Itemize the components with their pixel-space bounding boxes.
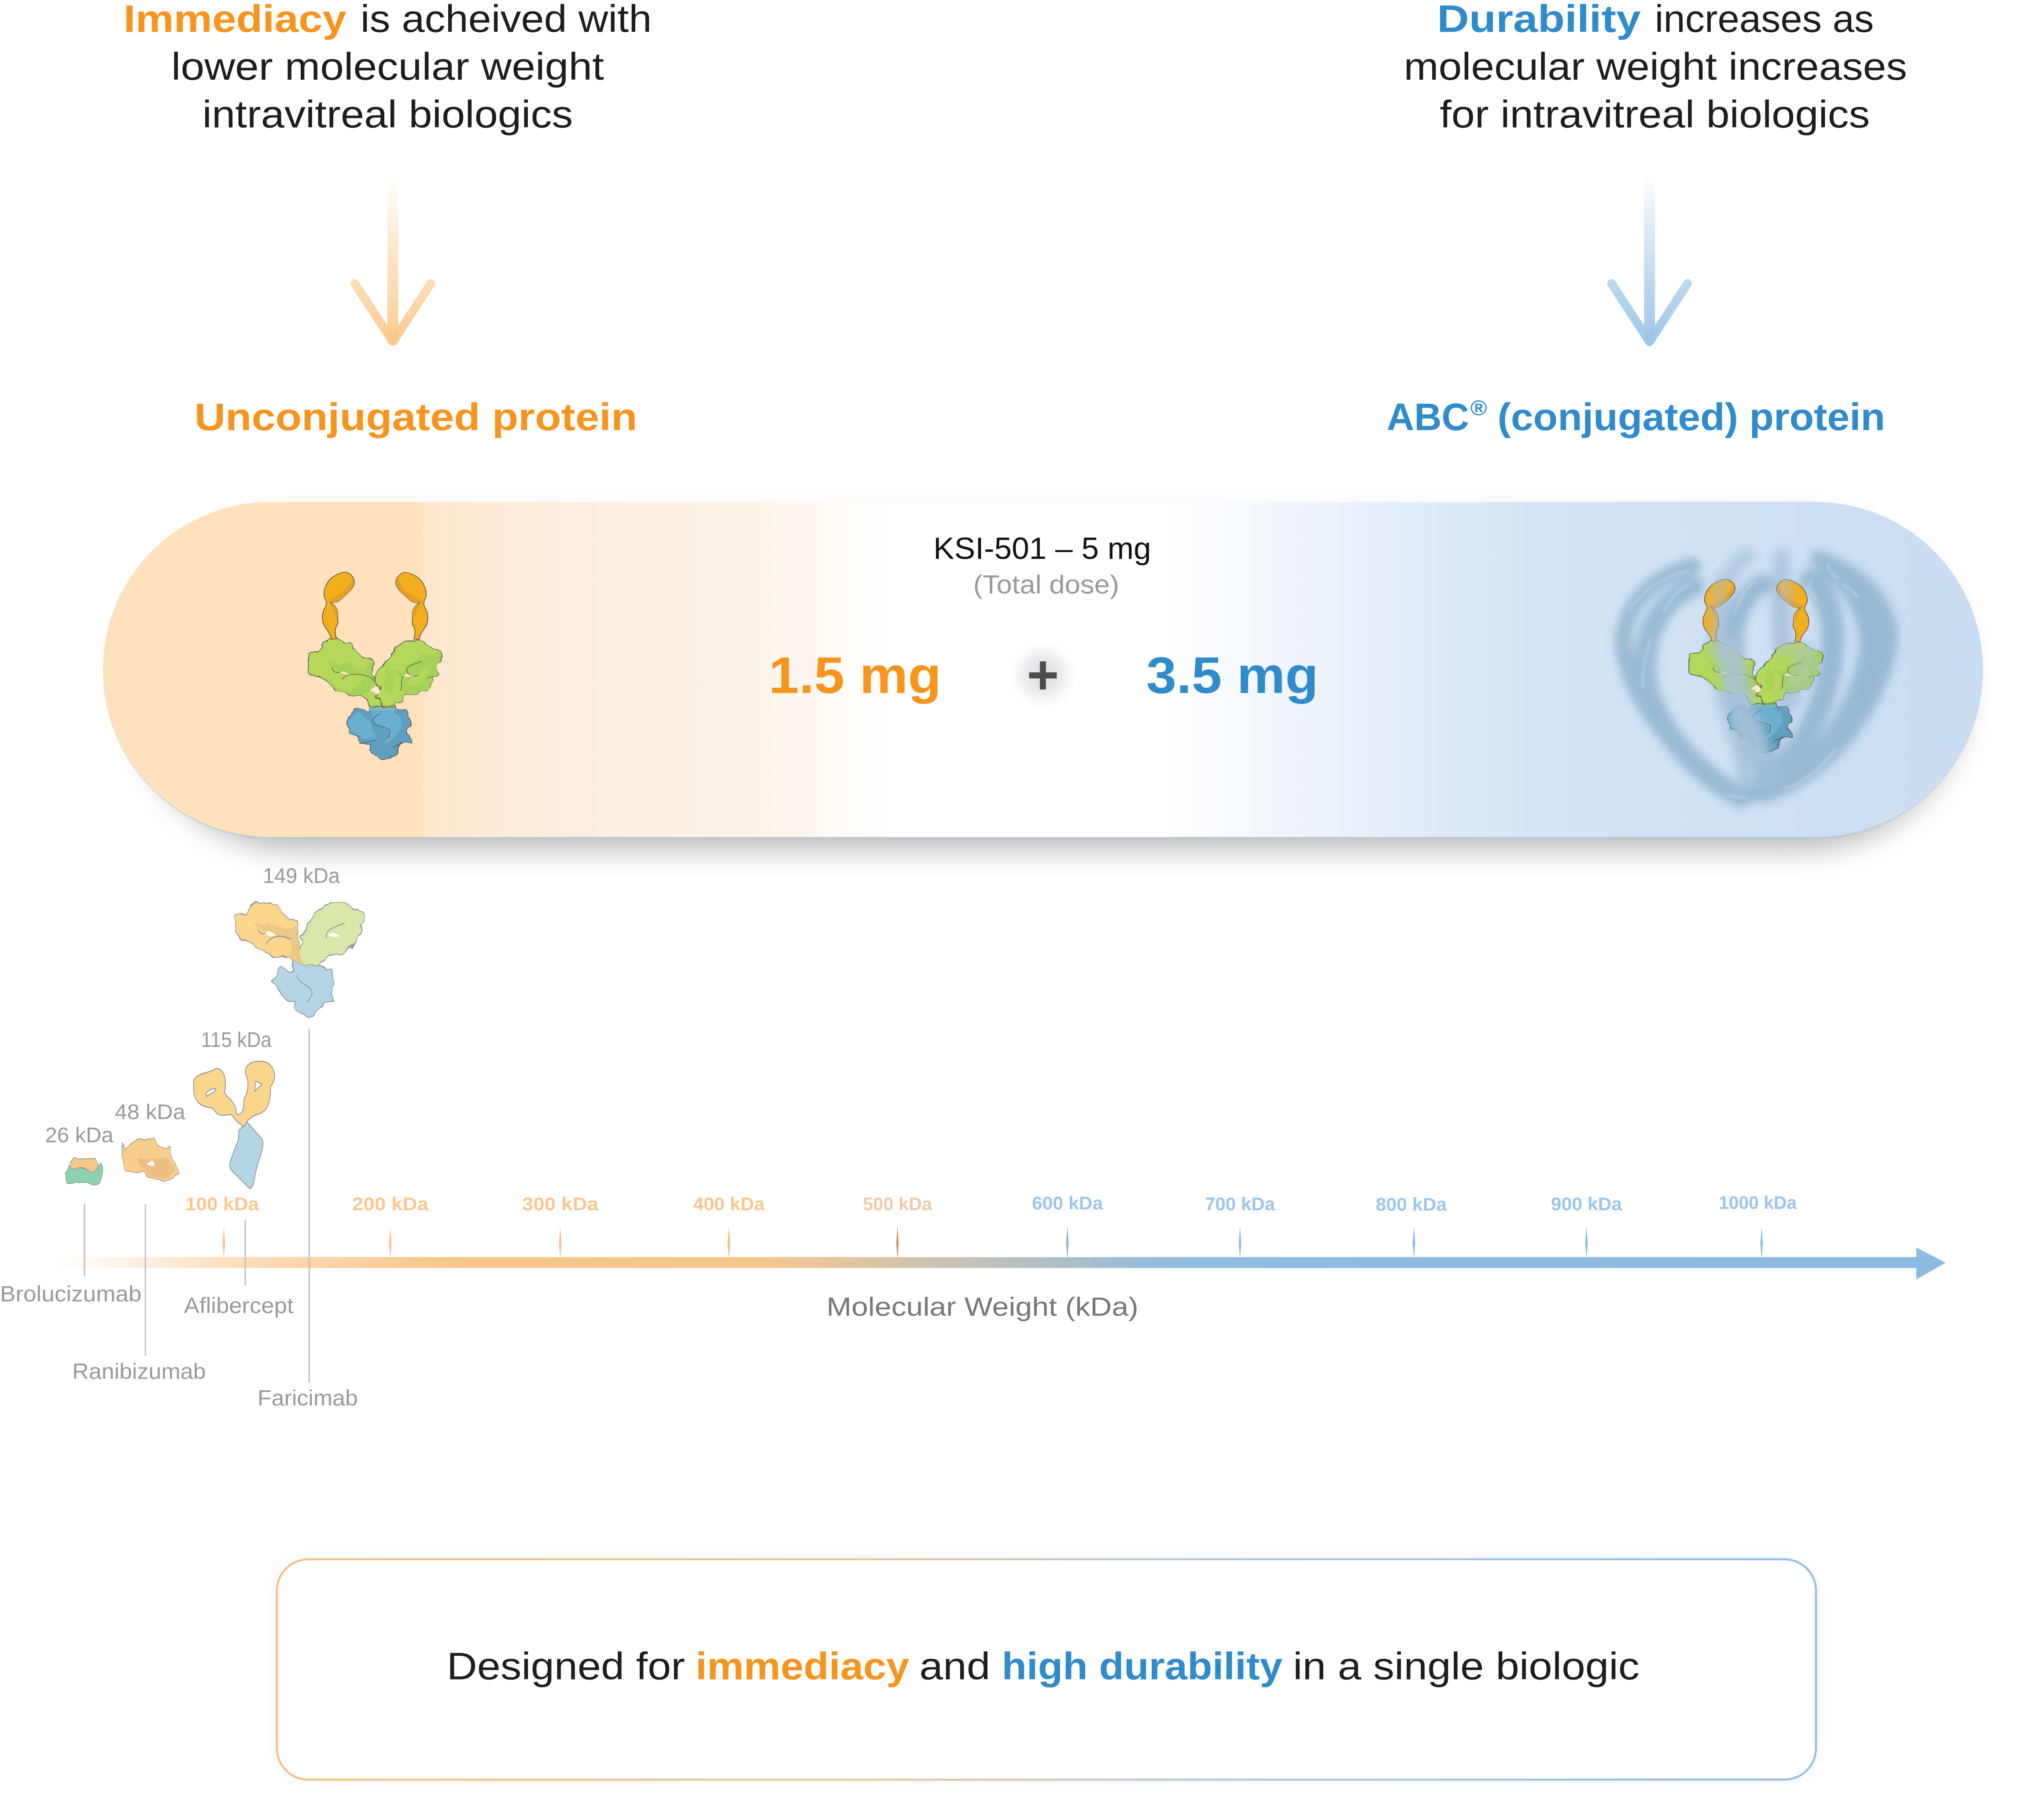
- plus sign: +: [1027, 644, 1059, 706]
- heading: immediacy: intravitreal biologics: [203, 93, 573, 136]
- conclusion text: [447, 1644, 1640, 1687]
- chart: molecular weight axis: [52, 1192, 1945, 1322]
- dose: unconjugated: 1.5 mg: [769, 646, 941, 704]
- heading: immediacy: lower molecular weight: [171, 45, 604, 88]
- icon: conjugated protein with polymer: [1624, 556, 1890, 798]
- label: ABC conjugated protein: ABC: [1387, 395, 1469, 438]
- axis tick labels: 100 kDa: [185, 1194, 259, 1214]
- icon: aflibercept molecule: [194, 1061, 275, 1188]
- panel: conclusion box: [277, 1559, 1816, 1779]
- total dose note: (Total dose): [973, 570, 1119, 599]
- axis arrow: [52, 1247, 1945, 1279]
- axis title: Molecular Weight (kDa): [826, 1292, 1138, 1322]
- axis tick labels: [185, 1192, 1797, 1215]
- arrow: down to unconjugated protein: [355, 174, 431, 342]
- label: Faricimab: Faricimab: [258, 1386, 358, 1411]
- icon: ranibizumab molecule: [122, 1138, 179, 1180]
- axis tick labels: 200 kDa: [352, 1194, 429, 1214]
- conclusion text: Designed for: [447, 1644, 685, 1687]
- label: 149 kDa: 149 kDa: [263, 865, 340, 888]
- axis tick labels: 700 kDa: [1205, 1194, 1275, 1214]
- icon: faricimab molecule: [234, 901, 365, 1017]
- label: ABC conjugated protein: ®: [1470, 397, 1487, 420]
- label: Ranibizumab: Ranibizumab: [72, 1359, 206, 1384]
- panel: dose pill: [103, 502, 1983, 850]
- axis ticks: [222, 1227, 1763, 1259]
- label: unconjugated protein: Unconjugated protein: [195, 395, 637, 438]
- axis tick labels: 1000 kDa: [1719, 1192, 1797, 1213]
- label: 115 kDa: 115 kDa: [201, 1028, 272, 1052]
- label: 48 kDa: 48 kDa: [115, 1101, 185, 1124]
- icon: unconjugated protein: [308, 572, 442, 759]
- conclusion text: immediacy: [696, 1644, 910, 1687]
- axis tick labels: 400 kDa: [693, 1194, 765, 1214]
- leader lines: [85, 1029, 309, 1383]
- conclusion text: and: [919, 1644, 990, 1687]
- label: Brolucizumab: Brolucizumab: [0, 1282, 141, 1306]
- axis tick labels: 500 kDa: [863, 1194, 932, 1214]
- label: Aflibercept: Aflibercept: [184, 1293, 294, 1318]
- dose: conjugated: 3.5 mg: [1146, 646, 1319, 704]
- heading: durability: for intravitreal biologics: [1440, 93, 1870, 136]
- label: ABC conjugated protein: (conjugated) protein: [1498, 395, 1885, 438]
- heading: durability: [1404, 0, 1907, 136]
- axis tick labels: 300 kDa: [522, 1194, 599, 1214]
- icon: brolucizumab molecule: [65, 1157, 103, 1185]
- total dose title: KSI-501 – 5 mg: [933, 531, 1151, 565]
- arrow: down to conjugated protein: [1611, 174, 1687, 342]
- axis tick labels: 600 kDa: [1032, 1193, 1103, 1213]
- label: 26 kDa: 26 kDa: [45, 1124, 114, 1147]
- axis tick labels: 800 kDa: [1376, 1194, 1447, 1215]
- conclusion text: high durability: [1002, 1644, 1282, 1687]
- axis tick labels: 900 kDa: [1551, 1194, 1622, 1214]
- heading: immediacy: [124, 0, 652, 136]
- conclusion text: in a single biologic: [1293, 1644, 1640, 1687]
- heading: durability: molecular weight increases: [1404, 45, 1907, 88]
